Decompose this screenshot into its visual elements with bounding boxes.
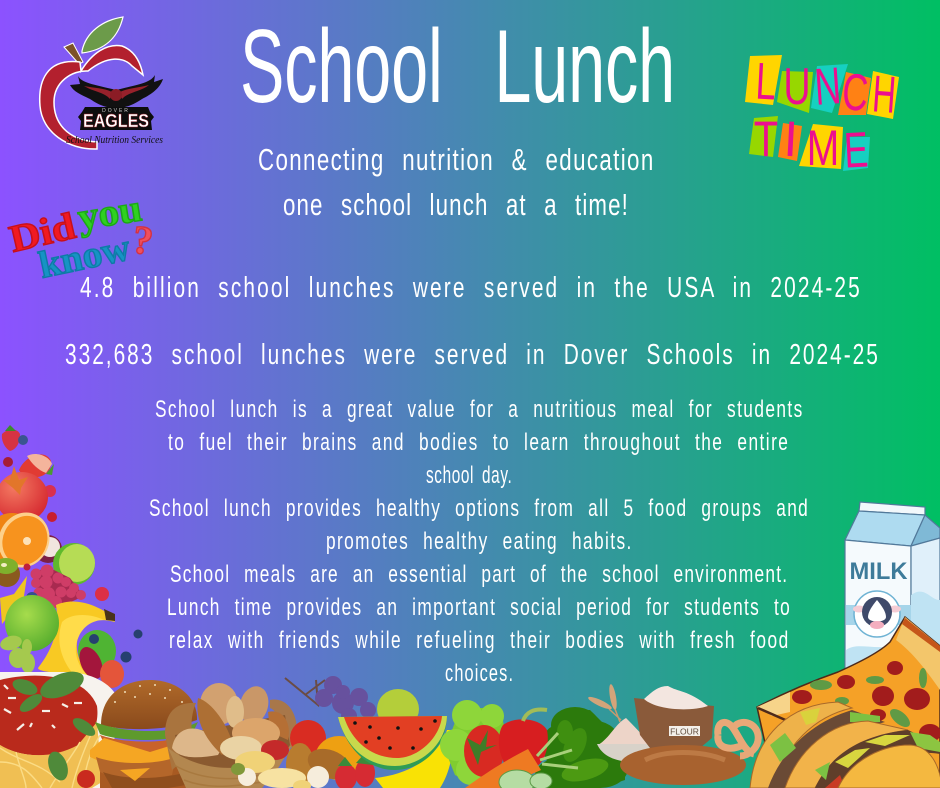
did you know sticker: Did <box>6 205 79 261</box>
lunch time sticker <box>745 51 899 179</box>
illustration: pretzel <box>718 722 758 756</box>
illustration: watermelon <box>338 716 447 770</box>
icon: apple crescent <box>40 45 143 149</box>
lunch time sticker: T <box>754 111 778 167</box>
illustration: fruit pile <box>0 425 142 688</box>
lunch time sticker: U <box>783 57 811 115</box>
illustration: salad vegetables <box>440 700 628 788</box>
body paragraph: Lunch time provides an important social period for students to <box>167 594 790 621</box>
red grapes <box>33 566 84 606</box>
lunch time sticker: M <box>807 119 839 176</box>
body paragraph: School meals are an essential part of the school environment. <box>170 561 787 588</box>
illustration: spaghetti plate <box>0 666 118 788</box>
taco 1 <box>750 702 852 788</box>
logo: Dover Eagles apple <box>40 17 163 149</box>
illustration: purple grapes <box>285 676 376 724</box>
body paragraph: relax with friends while refueling their bodies with fresh food <box>169 627 788 654</box>
body paragraph: school day. <box>426 463 512 489</box>
pomegranate <box>0 472 48 522</box>
icon: apple stem <box>64 43 83 64</box>
lettuce <box>445 708 505 785</box>
star fruit <box>0 576 34 624</box>
illustration: flour sack <box>634 686 714 748</box>
cucumber <box>499 770 535 788</box>
strawberry half <box>19 454 51 477</box>
fact: Dover lunches served: 332,683 school lunches were served in Dover Schools in 2024-25 <box>65 339 878 371</box>
lime <box>53 543 95 585</box>
illustration: burger <box>90 680 198 788</box>
strawberries <box>335 764 357 788</box>
milk label: MILK <box>850 558 908 585</box>
lunch time sticker: L <box>754 51 778 111</box>
illustration: bread basket <box>165 683 297 788</box>
icon: eagle <box>70 75 163 108</box>
did you know sticker <box>6 187 156 287</box>
body paragraph: School lunch is a great value for a nutritious meal for students <box>155 396 802 423</box>
carrot <box>465 749 541 788</box>
illustration: milk carton <box>845 502 940 690</box>
pomegranate seeds <box>75 643 107 683</box>
mangosteen <box>34 535 62 563</box>
body paragraph: promotes healthy eating habits. <box>326 528 631 555</box>
icon: apple leaf <box>82 17 123 53</box>
illustration: bread loaf <box>620 745 746 785</box>
taco 2 <box>785 721 908 788</box>
tomato <box>464 725 504 777</box>
body paragraph: choices. <box>445 660 513 687</box>
tagline <box>258 142 653 222</box>
illustration: mixed fruit and nuts <box>231 720 375 788</box>
lunch time sticker: E <box>843 123 870 179</box>
banana bunch <box>38 601 115 680</box>
illustration: banana <box>375 730 453 788</box>
body paragraph <box>149 396 808 687</box>
fact: USA lunches served: 4.8 billion school lunches were served in the USA in 2024-25 <box>80 272 860 304</box>
illustration: pizza slice <box>757 617 940 788</box>
did you know sticker: ? <box>130 216 156 264</box>
body paragraph: School lunch provides healthy options from all 5 food groups and <box>149 495 808 522</box>
bell pepper <box>499 719 548 768</box>
tagline: one school lunch at a time! <box>283 187 628 222</box>
green apple 2 <box>78 630 116 672</box>
kiwi <box>0 561 20 587</box>
icon: cow badge <box>853 591 901 637</box>
badge: Eagles: DOVER <box>102 108 130 114</box>
lunch time sticker: I <box>782 111 799 167</box>
spinach <box>545 710 625 788</box>
body paragraph: to fuel their brains and bodies to learn throughout the entire <box>168 429 788 456</box>
did you know sticker: you <box>75 187 145 239</box>
taco 3 <box>838 745 940 788</box>
illustration: tacos <box>750 702 940 788</box>
lunch time sticker: N <box>813 56 843 116</box>
did you know sticker: know <box>35 226 134 287</box>
lunch time sticker: H <box>871 66 898 125</box>
peach <box>100 660 124 688</box>
pale grapes <box>0 633 35 673</box>
flour label: FLOUR <box>670 726 699 736</box>
green apple <box>5 595 59 651</box>
logo caption: School Nutrition Services <box>66 135 163 146</box>
badge: Eagles: EAGLES <box>83 111 149 131</box>
strawberry <box>2 430 20 451</box>
tagline: Connecting nutrition & education <box>258 142 653 177</box>
blueberries <box>89 630 142 662</box>
illustration: wheat and flour bowl <box>587 684 652 762</box>
illustration: green apple <box>377 689 419 729</box>
lunch time sticker: C <box>840 64 870 123</box>
orange slice <box>0 513 38 563</box>
title: School Lunch <box>240 8 675 125</box>
raspberry <box>95 587 109 601</box>
